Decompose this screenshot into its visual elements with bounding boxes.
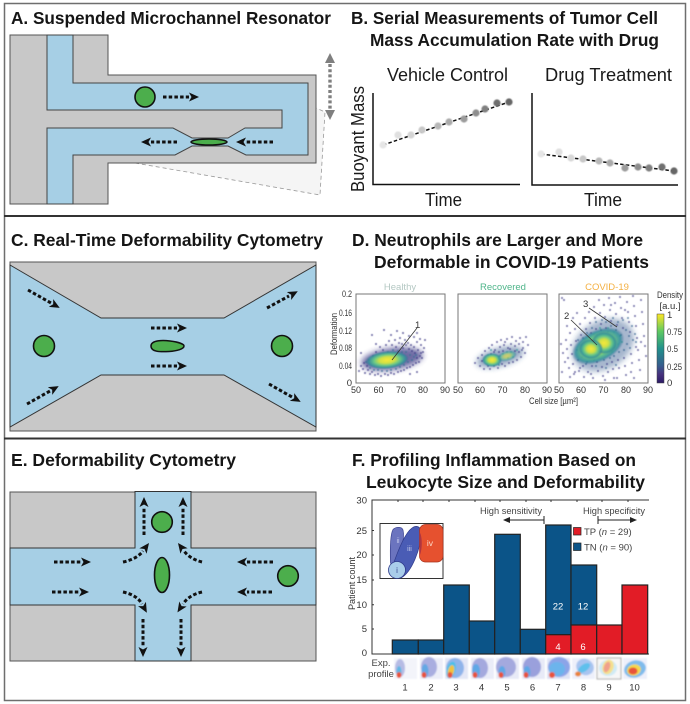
flow arrows xyxy=(52,507,273,647)
histogram xyxy=(372,500,649,654)
colour bar legend: Density xyxy=(657,290,683,301)
histogram: 22 xyxy=(553,602,563,612)
bin numbers: 10 xyxy=(629,682,640,694)
y tick labels: 0 xyxy=(362,648,367,659)
title D: D. Neutrophils are Larger and More xyxy=(352,230,643,250)
bin numbers: 9 xyxy=(606,682,612,694)
panel A: suspended microchannel resonator xyxy=(10,8,335,204)
resonator body xyxy=(10,35,316,204)
axis tick labels: 90 xyxy=(440,385,450,396)
bin numbers: 3 xyxy=(453,682,459,694)
colour bar legend xyxy=(657,290,683,389)
legend: TN (n = 90) xyxy=(584,542,632,554)
experimental profile label: profile xyxy=(368,669,394,680)
flow arrows xyxy=(27,290,292,404)
high sensitivity annotation xyxy=(480,506,544,524)
title F: F. Profiling Inflammation Based on xyxy=(352,450,636,470)
channel walls xyxy=(10,492,316,661)
colour bar legend: 0 xyxy=(667,378,672,389)
title A: A. Suspended Microchannel Resonator xyxy=(11,8,331,28)
inset gating diagram: iv xyxy=(427,538,434,548)
title D: Deformable in COVID-19 Patients xyxy=(374,252,649,272)
channel walls xyxy=(10,262,316,431)
bin numbers: 1 xyxy=(402,682,408,694)
x axis label: time left: Time xyxy=(425,190,462,210)
axis tick labels: 90 xyxy=(542,385,552,396)
y axis title: Patient count xyxy=(347,557,358,610)
x axis title: Cell size [µm²] xyxy=(529,396,578,407)
annotation 3: 3 xyxy=(583,299,588,310)
histogram: 12 xyxy=(578,602,588,612)
flow arrow: right xyxy=(163,96,189,98)
axis tick labels: 0.16 xyxy=(339,308,352,319)
x axis label: time right: Time xyxy=(584,190,622,210)
y tick labels: 15 xyxy=(356,575,367,586)
experimental profile thumbnails xyxy=(394,656,648,680)
resonator sensor zone shadow xyxy=(135,108,325,195)
bin numbers xyxy=(402,682,640,694)
axis tick labels: 0.08 xyxy=(339,343,352,354)
bin numbers: 2 xyxy=(428,682,434,694)
title E: E. Deformability Cytometry xyxy=(11,450,236,470)
axis tick labels: 50 xyxy=(554,385,564,396)
inset gating diagram: i xyxy=(396,566,398,575)
cell: inlet xyxy=(34,336,54,356)
cell: round xyxy=(135,87,155,107)
axis tick labels: 60 xyxy=(374,385,384,396)
experimental profile label: Exp. xyxy=(371,658,391,669)
title B: Mass Accumulation Rate with Drug xyxy=(370,30,659,50)
y tick labels: 10 xyxy=(356,600,367,611)
annotation 1: 1 xyxy=(415,320,420,331)
axis tick labels xyxy=(339,289,653,396)
scatter: COVID-19 xyxy=(559,282,648,383)
axis tick labels: 60 xyxy=(576,385,586,396)
histogram: 6 xyxy=(580,642,586,653)
axis tick labels: 0.12 xyxy=(339,326,352,337)
legend xyxy=(574,527,632,554)
y tick labels: 5 xyxy=(362,624,367,635)
inset gating diagram: ii xyxy=(396,538,400,545)
title B: B. Serial Measurements of Tumor Cell xyxy=(351,8,658,28)
scatter: healthy xyxy=(356,282,445,383)
title B xyxy=(351,8,659,50)
y axis title: Deformation xyxy=(329,313,340,355)
flow arrow: lower left xyxy=(151,140,177,144)
axis tick labels: 80 xyxy=(621,385,631,396)
scatter: recovered: Recovered xyxy=(480,282,526,293)
experimental profile label xyxy=(368,658,394,680)
axis tick labels: 80 xyxy=(418,385,428,396)
heading: drug treatment: Drug Treatment xyxy=(545,65,672,85)
colour bar legend: [a.u.] xyxy=(659,301,681,312)
cell: outlet xyxy=(272,336,292,356)
cross channel xyxy=(10,492,316,661)
y tick labels xyxy=(356,496,367,659)
title F xyxy=(352,450,645,492)
axis tick labels: 60 xyxy=(475,385,485,396)
axis tick labels: 70 xyxy=(498,385,508,396)
axis tick labels: 90 xyxy=(643,385,653,396)
colour bar legend: 0.75 xyxy=(667,327,682,338)
scatter: recovered xyxy=(458,282,547,383)
y tick labels: 30 xyxy=(356,496,367,506)
channel xyxy=(10,265,316,427)
chart: drug treatment xyxy=(532,93,678,185)
panel B: serial measurements xyxy=(348,8,678,210)
inset gating diagram: iii xyxy=(407,546,412,553)
panel F: profiling inflammation xyxy=(347,450,649,694)
panel E: deformability cytometry xyxy=(10,450,316,661)
annotation 2: 2 xyxy=(564,311,569,322)
legend: TP (n = 29) xyxy=(584,527,632,538)
cell: squeezed xyxy=(191,139,227,145)
cell: stretched xyxy=(154,558,170,592)
panel D: neutrophils scatter xyxy=(329,230,683,407)
bin numbers: 8 xyxy=(581,682,586,694)
microchannel xyxy=(47,35,308,204)
inset gating diagram xyxy=(380,524,443,578)
axis tick labels: 80 xyxy=(520,385,530,396)
colour bar legend: 1 xyxy=(667,310,672,321)
oscillation arrow xyxy=(325,53,335,120)
colour bar legend: 0.25 xyxy=(667,362,682,373)
axis tick labels: 70 xyxy=(598,385,608,396)
panel C: real-time deformability cytometry xyxy=(10,230,323,431)
colour bar legend: 0.5 xyxy=(667,344,678,355)
high specificity annotation: High specificity xyxy=(583,506,645,517)
scatter: COVID-19: COVID-19 xyxy=(585,282,629,293)
axis tick labels: 0.04 xyxy=(339,361,352,372)
axis tick labels: 50 xyxy=(453,385,463,396)
title F: Leukocyte Size and Deformability xyxy=(366,472,645,492)
cell: right xyxy=(278,566,298,586)
title C: C. Real-Time Deformability Cytometry xyxy=(11,230,323,250)
cell: deformed xyxy=(151,341,184,352)
heading: vehicle control: Vehicle Control xyxy=(387,65,508,85)
axis tick labels: 0.2 xyxy=(342,289,352,300)
flow arrow: lower right xyxy=(246,140,273,144)
cell: top xyxy=(152,512,172,532)
bin numbers: 6 xyxy=(530,682,535,694)
bin numbers: 7 xyxy=(555,682,561,694)
y axis label: Buoyant Mass xyxy=(348,86,368,192)
axis tick labels: 0 xyxy=(347,378,352,389)
y tick labels: 25 xyxy=(356,526,367,537)
title D xyxy=(352,230,649,272)
high sensitivity annotation: High sensitivity xyxy=(480,506,542,517)
axis tick labels: 50 xyxy=(351,385,361,396)
high specificity annotation xyxy=(583,506,645,524)
chart: vehicle control xyxy=(373,93,520,184)
axis tick labels: 70 xyxy=(396,385,406,396)
y tick labels: 20 xyxy=(356,550,367,561)
bin numbers: 4 xyxy=(479,682,484,694)
bin numbers: 5 xyxy=(504,682,510,694)
histogram: 4 xyxy=(555,642,561,653)
scatter: healthy: Healthy xyxy=(384,282,416,293)
